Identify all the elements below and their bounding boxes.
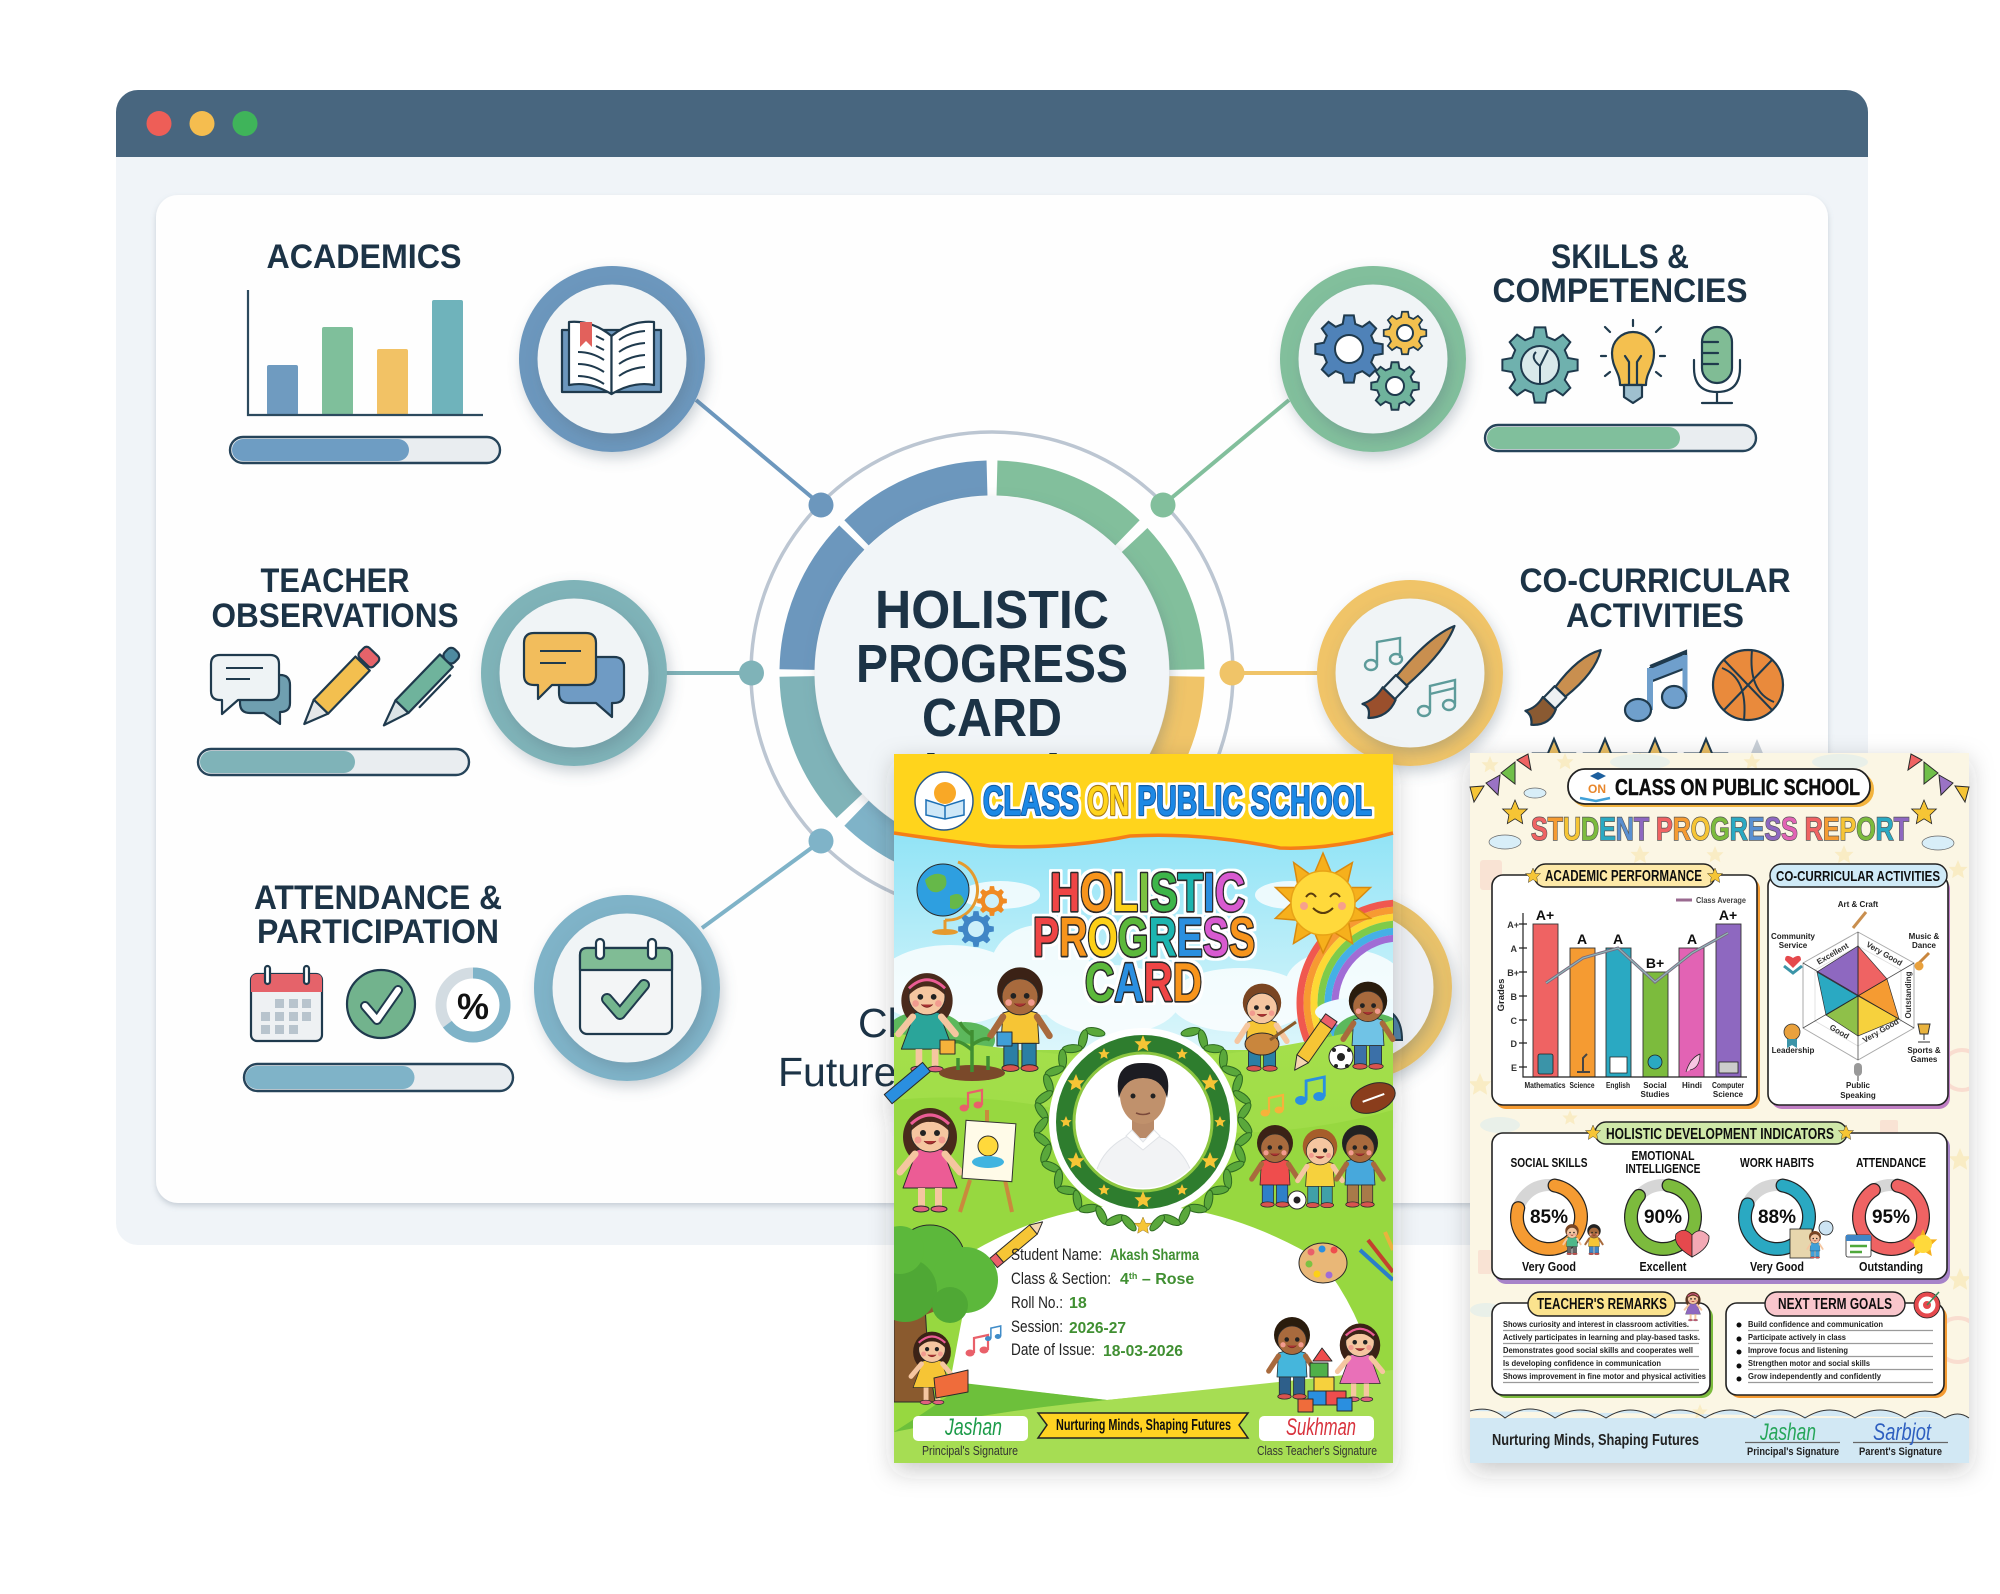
card title: HOLISTIC xyxy=(1050,861,1245,923)
school logo xyxy=(915,772,973,830)
teacher avatar xyxy=(1685,1292,1701,1321)
icons: pencils xyxy=(884,1062,1046,1268)
report footer xyxy=(1470,1409,1969,1463)
label goals xyxy=(1765,1292,1905,1316)
principal signature: Principal's Signature xyxy=(922,1443,1018,1458)
heading co-curricular: ACTIVITIES xyxy=(1566,597,1744,635)
label holistic: HOLISTIC DEVELOPMENT INDICATORS xyxy=(1606,1126,1834,1143)
icon: soccer ball xyxy=(1329,1045,1353,1069)
class teacher signature: Class Teacher's Signature xyxy=(1257,1443,1377,1458)
student details: Class & Section: xyxy=(1011,1269,1111,1288)
student details: Date of Issue: xyxy=(1011,1340,1095,1359)
remarks lines: Shows curiosity and interest in classroom activities. xyxy=(1503,1319,1689,1329)
school name pill xyxy=(1568,769,1874,807)
running kids trio xyxy=(1252,1125,1383,1209)
hub nodes xyxy=(739,492,1244,854)
heading skills: COMPETENCIES xyxy=(1492,272,1748,310)
icon: rugby ball xyxy=(1347,1077,1399,1119)
panel: co-curricular radar xyxy=(1768,864,1950,1109)
grade labels xyxy=(1536,907,1737,971)
label academic performance xyxy=(1525,864,1723,887)
label remarks: TEACHER'S REMARKS xyxy=(1537,1296,1667,1313)
grade labels: A+ xyxy=(1536,907,1554,923)
icon: globe and gears xyxy=(917,862,1007,947)
inner white panel xyxy=(156,195,1828,1203)
radar labels: Art & Craft xyxy=(1838,900,1879,909)
goals list: Build confidence and communication xyxy=(1748,1319,1883,1329)
icon: pen xyxy=(377,644,465,734)
icon: pencil xyxy=(297,645,381,731)
grade labels: A xyxy=(1613,931,1623,947)
icon circle calendar check xyxy=(534,895,720,1081)
indicator: emotional intelligence: EMOTIONAL xyxy=(1632,1149,1695,1163)
indicator: attendance xyxy=(1846,1156,1937,1274)
panel: teachers remarks xyxy=(1492,1292,1713,1398)
yellow header xyxy=(894,754,1393,848)
principal signature on report: Principal's Signature xyxy=(1747,1446,1839,1458)
student details: 18 xyxy=(1069,1295,1087,1312)
remarks lines: Demonstrates good social skills and cooperates well xyxy=(1503,1345,1693,1355)
icon: green check xyxy=(347,970,415,1038)
radar icons xyxy=(1784,912,1930,1081)
radar chart: Good xyxy=(1828,1023,1851,1041)
panel: next term goals xyxy=(1726,1292,1947,1398)
label remarks xyxy=(1528,1292,1675,1316)
icon: percent donut xyxy=(441,973,505,1037)
indicator: attendance: 95% xyxy=(1872,1207,1910,1228)
indicator: emotional intelligence: 90% xyxy=(1644,1207,1682,1228)
class teacher signature xyxy=(1257,1414,1377,1458)
heading teacher observations: TEACHER xyxy=(260,562,410,600)
y axis labels xyxy=(1507,920,1519,1073)
y axis labels: A+ xyxy=(1507,920,1519,930)
bar chart academics xyxy=(248,290,483,415)
clouds xyxy=(875,881,1405,1035)
hub title: CARD xyxy=(922,688,1062,748)
radar chart: Excellent xyxy=(1815,941,1850,967)
report title xyxy=(1503,800,1936,847)
icon circle book xyxy=(519,266,705,452)
icon: large pencil xyxy=(1289,1014,1337,1074)
report title: STUDENT PROGRESS REPORT xyxy=(1531,811,1909,847)
subject labels: Science xyxy=(1713,1090,1744,1099)
icon: smiling sun xyxy=(1261,835,1391,964)
icon: speech bubbles small xyxy=(211,655,290,724)
student details: Student Name: xyxy=(1011,1245,1102,1264)
bushes xyxy=(894,1014,1393,1047)
hub title: PROGRESS xyxy=(856,634,1128,694)
icon: calendar small xyxy=(251,966,322,1041)
radar chart: Outstanding xyxy=(1904,971,1913,1019)
heading teacher observations: OBSERVATIONS xyxy=(212,597,458,635)
browser title bar xyxy=(116,90,1868,157)
principal signature on report xyxy=(1745,1419,1840,1458)
hub title: (HPC) xyxy=(917,744,1067,804)
white info area xyxy=(950,1205,1375,1400)
icon: teal gear xyxy=(1502,327,1578,403)
card title: PROGRESS xyxy=(1033,906,1255,968)
indicator: social skills: SOCIAL SKILLS xyxy=(1510,1156,1588,1170)
card: student progress report xyxy=(1469,752,1982,1463)
radar labels: Community xyxy=(1771,932,1816,941)
icon: palette and brushes xyxy=(1299,1232,1393,1283)
student photo medallion xyxy=(1031,1019,1255,1234)
subject labels: Hindi xyxy=(1682,1081,1702,1090)
subject labels xyxy=(1524,1081,1744,1099)
progress bar attendance xyxy=(244,1064,513,1091)
radar chart: Very Good xyxy=(1861,1017,1900,1045)
grade bars xyxy=(1533,924,1741,1077)
motto banner: Nurturing Minds, Shaping Futures xyxy=(1056,1417,1231,1434)
parent signature on report: Sarbjot xyxy=(1873,1419,1932,1446)
kid painting with easel xyxy=(900,1108,1016,1212)
radar labels: Public xyxy=(1846,1081,1871,1090)
student details: 4 xyxy=(1120,1271,1129,1288)
school name pill: CLASS ON PUBLIC SCHOOL xyxy=(1615,774,1860,800)
icon: paint brush small xyxy=(1521,642,1609,731)
bunting right xyxy=(1908,754,1969,802)
kids with building blocks xyxy=(1269,1317,1382,1412)
faint background pattern xyxy=(1469,752,1982,1418)
icon: microphone xyxy=(1694,327,1740,403)
grass hills xyxy=(894,1020,1393,1106)
card title: CARD xyxy=(1085,951,1202,1013)
panel: holistic development indicators xyxy=(1492,1122,1950,1284)
radar chart xyxy=(1803,932,1914,1060)
principal signature: Jashan xyxy=(944,1414,1002,1441)
grade labels: A xyxy=(1577,931,1587,947)
bunting left xyxy=(1470,754,1531,802)
y axis labels: D xyxy=(1510,1039,1518,1049)
subject labels: Science xyxy=(1570,1081,1595,1090)
progress bar skills xyxy=(1485,425,1756,451)
student photo xyxy=(1096,1063,1190,1188)
subject labels: Studies xyxy=(1641,1090,1670,1099)
y axis labels: E xyxy=(1511,1063,1517,1073)
student details: Session: xyxy=(1011,1317,1063,1336)
grades axis title: Grades xyxy=(1496,979,1507,1011)
goals list xyxy=(1736,1319,1933,1382)
window control dots xyxy=(146,111,258,136)
radar labels: Speaking xyxy=(1840,1091,1876,1100)
parent signature on report: Parent's Signature xyxy=(1859,1446,1942,1458)
section: co-curricular activities xyxy=(1317,562,1790,777)
radar labels: Leadership xyxy=(1772,1046,1814,1055)
heading academics: ACADEMICS xyxy=(266,238,462,276)
goals list: Improve focus and listening xyxy=(1748,1345,1848,1355)
partly hidden yellow circle xyxy=(1266,894,1452,1080)
student details: th xyxy=(1129,1271,1137,1281)
remarks lines: Shows improvement in fine motor and physical activities xyxy=(1503,1371,1706,1381)
radar chart: Very Good xyxy=(1865,940,1904,968)
sky xyxy=(894,825,1393,1050)
radar labels xyxy=(1771,900,1941,1100)
kids gardening xyxy=(898,967,1049,1081)
browser window xyxy=(116,90,1868,1245)
indicator: social skills: 85% xyxy=(1530,1207,1568,1228)
student details: – Rose xyxy=(1137,1271,1194,1288)
heading attendance: PARTICIPATION xyxy=(257,913,499,951)
footer motto: Nurturing Minds, Shaping Futures xyxy=(1492,1432,1699,1449)
laurel wreath xyxy=(1031,1019,1255,1234)
grade labels: A xyxy=(1687,931,1697,947)
icon: target xyxy=(1914,1292,1940,1318)
indicator: emotional intelligence: Excellent xyxy=(1640,1259,1687,1274)
hub title: HOLISTIC xyxy=(875,580,1109,640)
icon: basketball xyxy=(1713,650,1783,720)
section: attendance and participation xyxy=(244,879,720,1091)
chart axes xyxy=(1519,913,1747,1077)
radar labels: Games xyxy=(1911,1055,1938,1064)
label co-curricular xyxy=(1770,864,1947,887)
radar labels: Music & xyxy=(1909,932,1940,941)
section: teacher observations xyxy=(198,562,667,775)
remarks lines: Actively participates in learning and play-based tasks. xyxy=(1503,1332,1700,1342)
music notes xyxy=(1261,1095,1283,1116)
central hub ring xyxy=(739,432,1244,914)
rainbow xyxy=(1296,900,1393,1042)
parent signature on report xyxy=(1853,1419,1948,1458)
indicator: social skills xyxy=(1510,1156,1603,1274)
goals list: Strengthen motor and social skills xyxy=(1748,1358,1870,1368)
heading skills: SKILLS & xyxy=(1551,238,1689,276)
label holistic xyxy=(1585,1122,1854,1144)
ring stars xyxy=(1060,1035,1226,1207)
clouds on report xyxy=(1489,788,1954,850)
grade labels: A+ xyxy=(1719,907,1737,923)
student details xyxy=(1011,1245,1199,1360)
indicator: attendance: Outstanding xyxy=(1859,1259,1923,1274)
class teacher signature: Sukhman xyxy=(1286,1414,1356,1441)
label co-curricular: CO-CURRICULAR ACTIVITIES xyxy=(1776,868,1940,885)
student details: 18-03-2026 xyxy=(1103,1343,1183,1360)
subject labels: Social xyxy=(1643,1081,1667,1090)
indicator: social skills: Very Good xyxy=(1522,1259,1576,1274)
radar labels: Dance xyxy=(1912,941,1937,950)
star rating xyxy=(1534,739,1777,777)
icon: percent donut: % xyxy=(457,986,489,1027)
progress bar teacher xyxy=(198,749,469,775)
remarks lines xyxy=(1503,1319,1706,1382)
legend: Class Average xyxy=(1696,895,1746,905)
legend xyxy=(1676,895,1746,905)
grade labels: B+ xyxy=(1646,955,1664,971)
class average line xyxy=(1546,933,1728,983)
partly hidden caption: Future xyxy=(778,1049,896,1095)
student details: 2026-27 xyxy=(1069,1320,1126,1337)
radar labels: Sports & xyxy=(1907,1046,1941,1055)
connector lines and nodes xyxy=(660,400,1320,928)
principal signature on report: Jashan xyxy=(1759,1419,1816,1446)
indicator: work habits xyxy=(1740,1156,1833,1274)
subject icons xyxy=(1538,1054,1738,1074)
icon circle brush and notes xyxy=(1317,580,1503,766)
card title xyxy=(1033,861,1255,1013)
goals list: Participate actively in class xyxy=(1748,1332,1846,1342)
subject labels: English xyxy=(1606,1081,1630,1090)
icon: music note xyxy=(1625,651,1686,721)
indicator: emotional intelligence xyxy=(1626,1149,1709,1274)
school name: CLASS ON PUBLIC SCHOOL xyxy=(983,777,1372,824)
icon circle chat xyxy=(481,580,667,766)
radar labels: Service xyxy=(1779,941,1808,950)
heading attendance: ATTENDANCE & xyxy=(254,879,502,917)
indicator: emotional intelligence: INTELLIGENCE xyxy=(1626,1162,1700,1176)
subject labels: Mathematics xyxy=(1524,1081,1566,1090)
card: holistic progress card cover xyxy=(877,749,1407,1484)
section: academics xyxy=(230,238,705,463)
icon: light bulb xyxy=(1601,320,1665,403)
indicator: work habits: WORK HABITS xyxy=(1740,1156,1814,1170)
subject labels: Computer xyxy=(1712,1081,1744,1090)
indicator: work habits: 88% xyxy=(1758,1207,1796,1228)
indicator: attendance: ATTENDANCE xyxy=(1856,1156,1926,1170)
motto banner xyxy=(1038,1413,1248,1438)
student details: Roll No.: xyxy=(1011,1293,1063,1312)
indicator: work habits: Very Good xyxy=(1750,1259,1804,1274)
section: skills and competencies xyxy=(1280,238,1756,452)
report logo xyxy=(1580,772,1610,801)
remarks lines: Is developing confidence in communication xyxy=(1503,1358,1661,1368)
label academic performance: ACADEMIC PERFORMANCE xyxy=(1545,868,1702,885)
panel: academic performance xyxy=(1492,864,1760,1109)
principal signature xyxy=(913,1414,1028,1458)
goals list: Grow independently and confidently xyxy=(1748,1371,1881,1381)
y axis labels: B xyxy=(1510,992,1518,1002)
y axis labels: A xyxy=(1510,944,1518,954)
icon circle gears xyxy=(1280,266,1466,452)
y axis labels: B+ xyxy=(1507,968,1519,978)
heading co-curricular: CO-CURRICULAR xyxy=(1520,562,1790,600)
y axis labels: C xyxy=(1510,1016,1518,1026)
label goals: NEXT TERM GOALS xyxy=(1778,1296,1892,1313)
report logo: ON xyxy=(1588,782,1606,796)
hidden section: future text and icon circle xyxy=(778,894,1452,1095)
partly hidden caption: Cl xyxy=(858,1000,897,1046)
kid with guitar and running boy xyxy=(1237,982,1393,1071)
tree with reading girl xyxy=(894,1224,998,1405)
student details: Akash Sharma xyxy=(1110,1247,1199,1264)
progress bar academics xyxy=(230,437,500,463)
